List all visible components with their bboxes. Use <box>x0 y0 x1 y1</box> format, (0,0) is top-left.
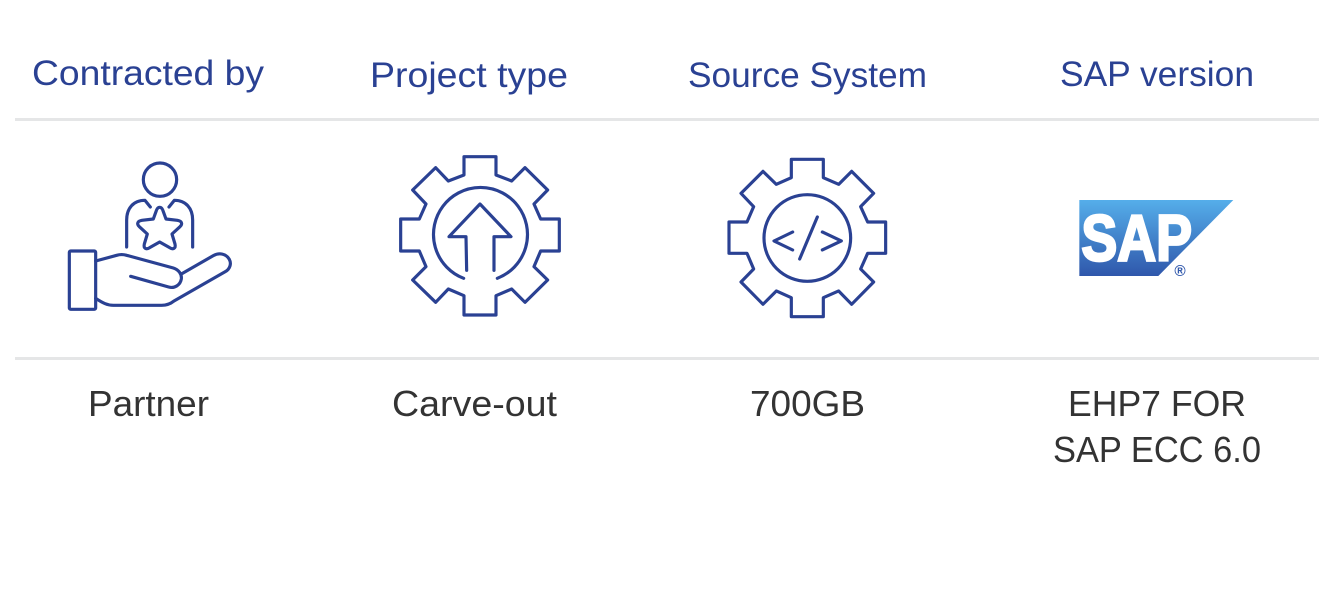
icon: hand holding person with star <box>69 163 230 309</box>
heading row <box>32 54 1254 95</box>
heading: SAP version: SAP version <box>1060 55 1254 94</box>
value: 700GB: 700GB <box>750 383 865 424</box>
value: EHP7 FOR SAP ECC 6.0: EHP7 FOR <box>1068 383 1246 424</box>
icon: gear with code brackets <box>729 159 886 317</box>
value: EHP7 FOR SAP ECC 6.0 <box>1053 383 1261 470</box>
heading: Source System: Source System <box>688 56 927 95</box>
heading: Contracted by: Contracted by <box>32 54 265 93</box>
icon: SAP logo: ® <box>1174 263 1186 280</box>
value row <box>88 383 1261 470</box>
heading: Project type: Project type <box>370 56 568 95</box>
value: Carve-out: Carve-out <box>392 383 557 424</box>
value: EHP7 FOR SAP ECC 6.0: SAP ECC 6.0 <box>1053 429 1261 470</box>
icon: gear with up arrow <box>401 157 559 315</box>
icon: SAP logo: SAP <box>1081 202 1192 275</box>
value: Partner: Partner <box>88 383 209 424</box>
